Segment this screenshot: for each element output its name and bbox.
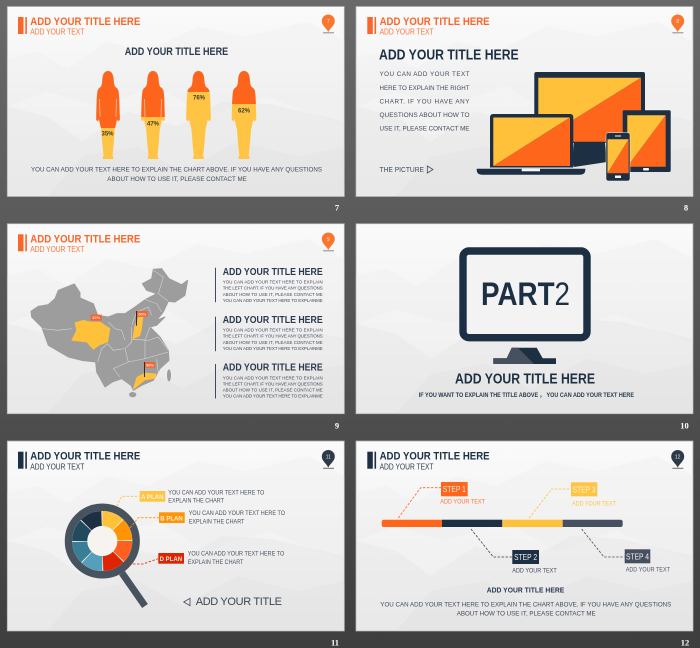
phone (606, 133, 630, 181)
panel: slide 10 (356, 224, 693, 414)
slide 11 header (18, 450, 140, 471)
text block 2: ADD YOUR TITLE HERE (223, 315, 323, 326)
step 3: STEP 3 (573, 485, 596, 494)
laptop (477, 114, 585, 175)
callout: B plan: EXPLAIN THE CHART (189, 518, 245, 525)
slide 8 header (367, 16, 490, 37)
callout: D plan (125, 551, 284, 566)
callout: A plan: YOU CAN ADD YOUR TEXT HERE TO (168, 490, 264, 497)
text block 1: ABOUT HOW TO USE IT, PLEASE CONTACT ME (223, 292, 323, 297)
heading: ADD YOUR TITLE HERE (487, 586, 564, 595)
step 2: STEP 2 (514, 553, 538, 562)
text block 2: YOU CAN ADD YOUR TEXT HERE TO EXPLAIN (223, 328, 323, 333)
text block 2 (215, 315, 323, 351)
slide 12 header: ADD YOUR TEXT (380, 462, 434, 471)
figure 47%: 47% (147, 122, 160, 128)
figure 62%: 62% (238, 108, 251, 114)
callout: D plan: EXPLAIN THE CHART (188, 559, 244, 566)
slide 11 header: ADD YOUR TEXT (30, 462, 84, 471)
text block 1 (215, 267, 323, 303)
icon: page pin 12 (671, 450, 684, 469)
monitor (534, 72, 645, 167)
panel: slide 9 (7, 224, 344, 414)
figure 76% (186, 71, 211, 159)
flag 32%: 32% (92, 315, 101, 320)
flag 32% (91, 315, 102, 321)
flag 60%: 60% (138, 311, 147, 316)
callout: D plan: YOU CAN ADD YOUR TEXT HERE TO (188, 551, 284, 558)
icon: page pin 8: 8 (676, 19, 679, 25)
heading: ADD YOUR TITLE HERE (455, 371, 595, 387)
text block 1: YOU CAN ADD YOUR TEXT HERE TO EXPLAIN (223, 280, 323, 285)
icon: monitor with PART2: PART2 (481, 276, 570, 312)
slide 8 header: ADD YOUR TITLE HERE (380, 16, 490, 28)
callout: D plan: D PLAN (160, 556, 182, 563)
icon: page pin 9: 9 (327, 237, 330, 243)
page number 9: 9 (335, 420, 339, 430)
paragraph (380, 71, 470, 132)
slide 12 header: ADD YOUR TITLE HERE (380, 450, 490, 462)
slide 9 header (18, 233, 140, 254)
flag 90% (144, 362, 155, 377)
text block 2: THE LEFT CHART. IF YOU HAVE ANY QUESTIONS (223, 334, 323, 339)
figure 35% (96, 71, 120, 159)
page number 7: 7 (335, 202, 340, 212)
step 2 (471, 529, 557, 574)
icon: page pin 7 (322, 15, 335, 33)
text block 3: ABOUT HOW TO USE IT, PLEASE CONTACT ME (223, 388, 323, 393)
icon: page pin 11 (322, 450, 335, 469)
body text (380, 601, 672, 618)
paragraph: HERE TO EXPLAIN THE RIGHT (380, 85, 470, 92)
text block 3: YOU CAN ADD YOUR TEXT HERE TO EXPLAINME (223, 394, 323, 399)
icon: page pin 8 (671, 15, 684, 33)
page number 10: 10 (680, 420, 689, 430)
slide 12 header (367, 450, 490, 471)
heading: ADD YOUR TITLE HERE (379, 46, 519, 64)
slide 8 header: ADD YOUR TEXT (380, 28, 434, 37)
label with arrow: ADD YOUR TITLE (196, 596, 282, 608)
step 1 (398, 482, 485, 518)
callout: A plan: A PLAN (141, 494, 164, 501)
figure 47% (141, 71, 165, 159)
text block 1: THE LEFT CHART. IF YOU HAVE ANY QUESTIONS (223, 286, 323, 291)
paragraph: YOU CAN ADD YOUR TEXT (380, 71, 470, 78)
slide 9 header: ADD YOUR TEXT (30, 245, 84, 254)
slide 11 header: ADD YOUR TITLE HERE (30, 450, 140, 462)
step 4: STEP 4 (626, 552, 649, 561)
text block 3 (215, 363, 323, 399)
panel: slide 8 (356, 6, 693, 196)
slide 7 header (18, 16, 140, 37)
tablet (623, 110, 671, 172)
body text (31, 167, 323, 183)
timeline bar (382, 520, 623, 527)
body text: YOU CAN ADD YOUR TEXT HERE TO EXPLAIN THE CHART ABOVE. IF YOU HAVE ANY QUESTIONS (380, 601, 672, 608)
paragraph: QUESTIONS ABOUT HOW TO (380, 112, 470, 119)
slide 9 header: ADD YOUR TITLE HERE (30, 233, 140, 245)
step 1: ADD YOUR TEXT (440, 500, 485, 506)
step 4 (582, 529, 670, 573)
text block 1: YOU CAN ADD YOUR TEXT HERE TO EXPLAINME (223, 298, 323, 303)
body text: ABOUT HOW TO USE IT, PLEASE CONTACT ME (107, 176, 247, 183)
figure 62% (232, 71, 256, 159)
step 1: STEP 1 (443, 485, 466, 494)
icon: monitor with PART2 (463, 251, 587, 364)
body text: YOU CAN ADD YOUR TEXT HERE TO EXPLAIN THE CHART ABOVE. IF YOU HAVE ANY QUESTIONS (31, 167, 323, 174)
figure 76%: 76% (193, 96, 206, 102)
icon: page pin 12: 12 (675, 454, 681, 460)
text block 2: YOU CAN ADD YOUR TEXT HERE TO EXPLAINME (223, 346, 323, 351)
chart: silhouette percentages (93, 71, 260, 160)
icon: page pin 7: 7 (327, 19, 330, 25)
map of China (31, 269, 188, 397)
panel: slide 11 (7, 441, 344, 631)
icon: device group (477, 72, 671, 181)
text block 3: ADD YOUR TITLE HERE (223, 363, 323, 374)
page number 8: 8 (684, 202, 688, 212)
slide 7 header: ADD YOUR TITLE HERE (30, 16, 140, 28)
figure 35%: 35% (101, 132, 114, 138)
step 3: ADD YOUR TEXT (572, 501, 616, 507)
callout: A plan (117, 490, 264, 506)
flag 60% (136, 311, 148, 326)
text block 1: ADD YOUR TITLE HERE (223, 267, 323, 278)
slide 7 header: ADD YOUR TEXT (30, 28, 84, 37)
text block 2: ABOUT HOW TO USE IT, PLEASE CONTACT ME (223, 340, 323, 345)
page number 12: 12 (681, 638, 689, 648)
panel: slide 12 (356, 441, 693, 631)
subtitle: IF YOU WANT TO EXPLAIN THE TITLE ABOVE ， YOU CAN ADD YOUR TEXT HERE (419, 393, 634, 399)
flag 90%: 90% (146, 362, 154, 367)
text block 3: THE LEFT CHART. IF YOU HAVE ANY QUESTIONS (223, 382, 323, 387)
step 4: ADD YOUR TEXT (626, 567, 670, 573)
paragraph: USE IT, PLEASE CONTACT ME (380, 126, 470, 132)
callout: A plan: EXPLAIN THE CHART (168, 498, 224, 505)
picture label with arrow: THE PICTURE (380, 167, 424, 174)
step 2: ADD YOUR TEXT (512, 568, 557, 574)
icon: page pin 9 (322, 233, 335, 251)
body text: ABOUT HOW TO USE IT, PLEASE CONTACT ME (457, 611, 596, 618)
text block 3: YOU CAN ADD YOUR TEXT HERE TO EXPLAIN (223, 376, 323, 381)
icon: magnifier with donut chart (68, 507, 145, 606)
heading: ADD YOUR TITLE HERE (125, 46, 228, 58)
step 3 (529, 482, 616, 518)
paragraph: CHART. IF YOU HAVE ANY (380, 98, 470, 106)
callout: B plan: B PLAN (160, 515, 183, 522)
page number 11: 11 (331, 638, 339, 648)
icon: page pin 11: 11 (326, 454, 331, 460)
callout: B plan (130, 510, 285, 528)
panel: slide 7 (7, 6, 344, 196)
callout: B plan: YOU CAN ADD YOUR TEXT HERE TO (189, 510, 285, 517)
